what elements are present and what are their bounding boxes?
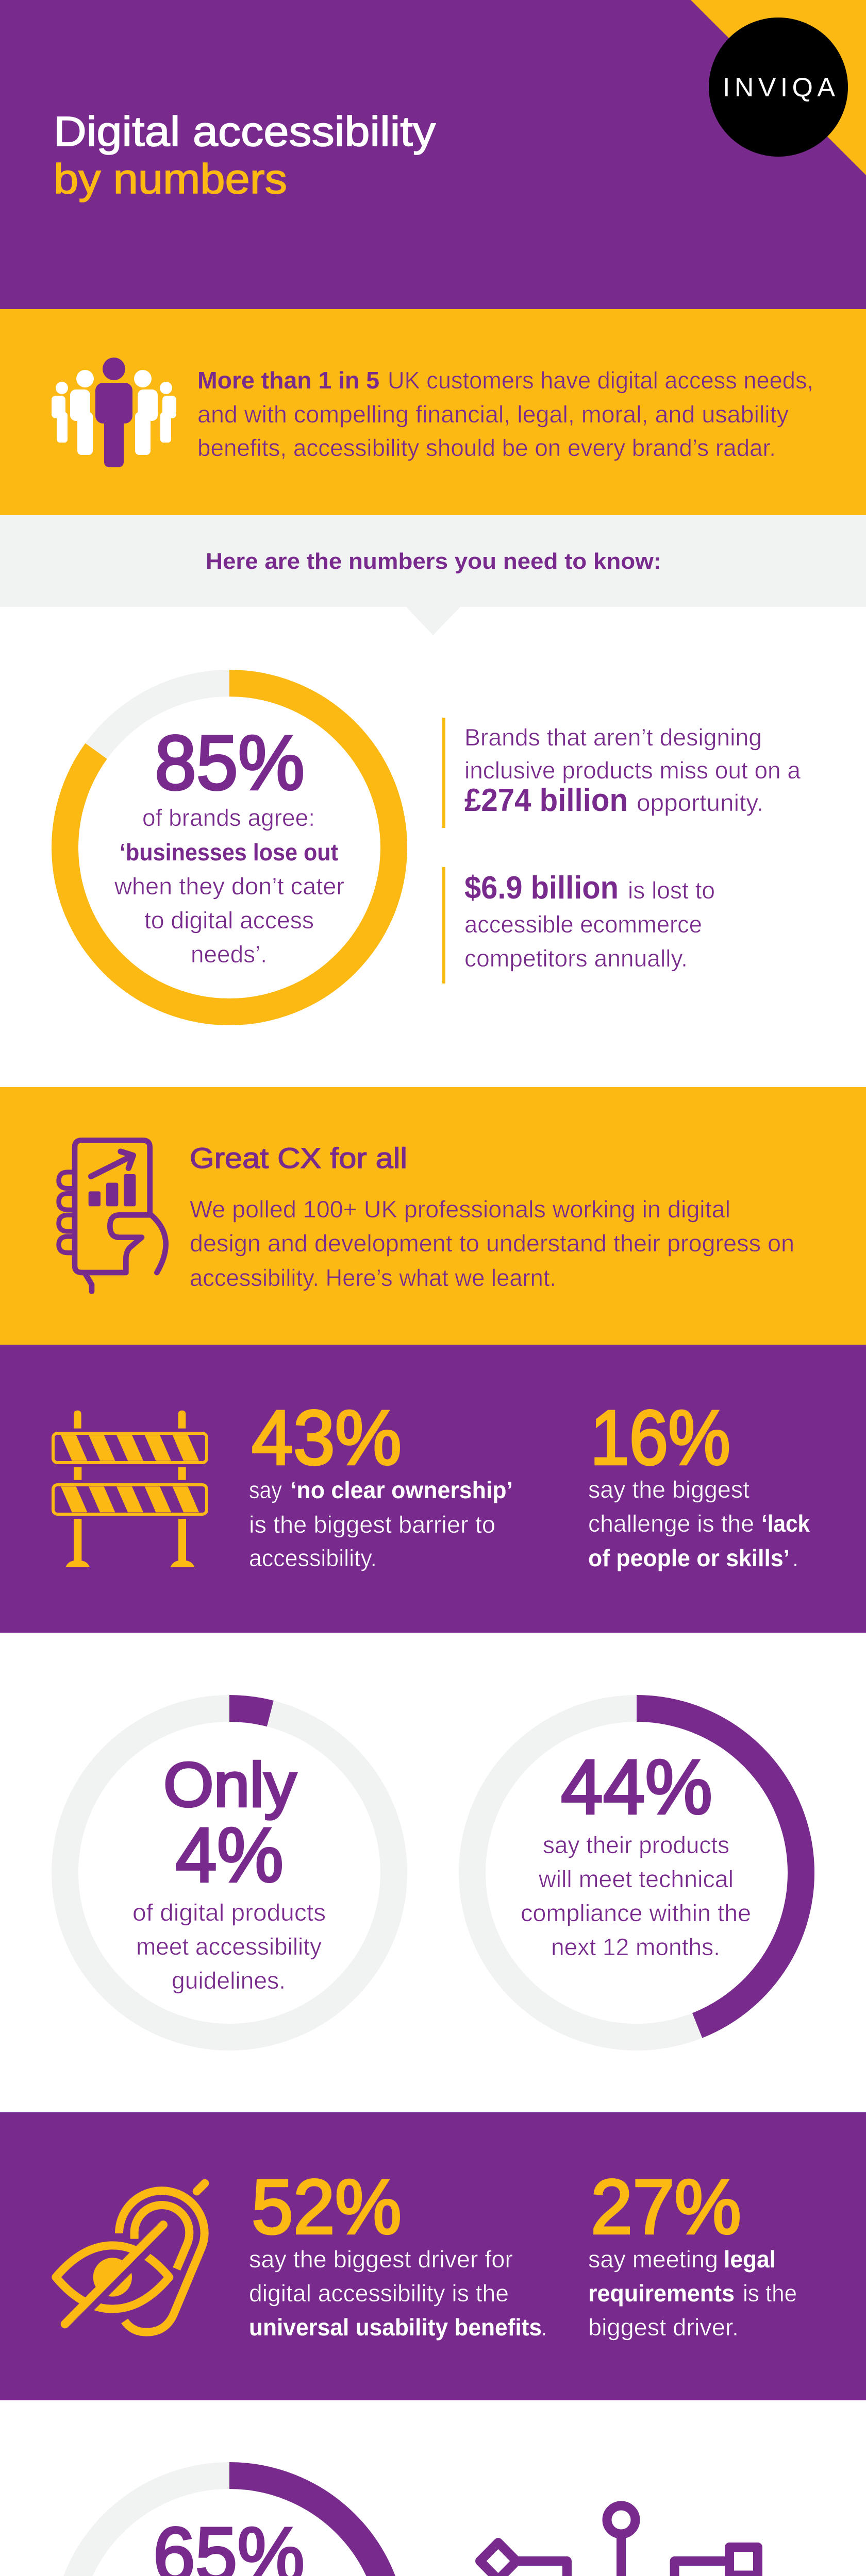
chart: 85% ring: to digital access	[144, 907, 314, 934]
icon: accessible laptop network	[471, 2506, 771, 2576]
chart: 85% ring	[65, 683, 394, 1012]
stat: 43%: is the biggest barrier to	[249, 1511, 495, 1538]
stat: 27%: say meeting	[588, 2246, 718, 2273]
callout: $6.9 billion: $6.9 billion	[464, 870, 619, 906]
icon: crossed eye and ear	[56, 2183, 205, 2332]
stat: 16%: ‘lack	[761, 1510, 810, 1537]
panel: barriers	[0, 1345, 866, 1633]
stat: 16%: 16%	[590, 1394, 730, 1481]
title	[54, 108, 436, 202]
chart: only 4% ring: 4%	[175, 1811, 284, 1898]
chart: only 4% ring: meet accessibility	[136, 1933, 322, 1960]
chart: 44% ring: say their products	[543, 1832, 729, 1858]
text block: design and development to understand their progress on	[190, 1230, 794, 1257]
callout: £274 billion: inclusive products miss out on a	[464, 757, 801, 784]
text block: accessibility. Here’s what we learnt.	[190, 1264, 556, 1291]
stat: 16%: challenge is the	[588, 1510, 754, 1537]
heading: Great CX for all	[190, 1142, 407, 1174]
chart: 85% ring: needs’.	[191, 941, 267, 968]
panel: great CX for all	[0, 1087, 866, 1345]
stat: 16%: .	[792, 1545, 798, 1571]
stat: 43%: 43%	[252, 1394, 402, 1481]
stat: 52%: .	[541, 2314, 547, 2341]
callout: $6.9 billion: competitors annually.	[464, 945, 688, 972]
chart: 85% ring: of brands agree:	[142, 804, 315, 831]
panel: drivers	[0, 2112, 866, 2400]
text block: intro statement: More than 1 in 5	[197, 367, 379, 394]
chart: 44% ring: 44%	[561, 1743, 712, 1830]
chart: only 4% ring: Only	[163, 1750, 296, 1820]
stat: 43%: say	[249, 1477, 282, 1503]
callout: $6.9 billion: is lost to	[628, 877, 715, 904]
panel: intro	[0, 309, 866, 515]
chart: 65% ring	[65, 2476, 394, 2576]
text block: intro statement: benefits, accessibility should be on every brand’s radar.	[197, 434, 776, 461]
title: Digital accessibility	[54, 108, 436, 155]
callout: £274 billion: Brands that aren’t designing	[464, 724, 762, 751]
callout: $6.9 billion	[442, 867, 715, 984]
stat: 27%: biggest driver.	[588, 2314, 739, 2341]
chart: only 4% ring: of digital products	[132, 1899, 326, 1926]
stat: 43%: ‘no clear ownership’	[290, 1477, 513, 1503]
panel: header	[0, 0, 866, 309]
title: by numbers	[54, 156, 287, 202]
stat: 52%	[249, 2163, 547, 2341]
stat: 27%: requirements	[588, 2280, 735, 2307]
chart: 85% ring: ‘businesses lose out	[120, 839, 338, 866]
stat: 43%	[249, 1394, 513, 1571]
chart: 44% ring: will meet technical	[538, 1866, 734, 1892]
chart: only 4% ring: guidelines.	[172, 1967, 286, 1994]
stat: 16%: of people or skills’	[588, 1545, 790, 1571]
chart: 85% ring: when they don’t cater	[114, 873, 344, 900]
stat: 52%: digital accessibility is the	[249, 2280, 509, 2307]
text block: intro statement: and with compelling financial, legal, moral, and usability	[197, 401, 789, 428]
chart: 44% ring: compliance within the	[521, 1900, 751, 1926]
stat: 27%	[588, 2163, 797, 2341]
heading: Here are the numbers you need to know:	[206, 549, 661, 574]
text block: intro statement	[197, 367, 813, 461]
panel: numbers heading	[0, 515, 866, 635]
stat: 16%: say the biggest	[588, 1476, 750, 1503]
icon: group of people	[52, 358, 176, 467]
stat: 27%: legal	[724, 2246, 776, 2273]
stat: 43%: accessibility.	[249, 1545, 377, 1571]
text block: intro statement: UK customers have digital access needs,	[388, 367, 813, 394]
stat: 16%	[588, 1394, 810, 1571]
logo: Inviqa badge	[709, 18, 848, 157]
chart: 44% ring	[472, 1708, 801, 2037]
stat: 52%: 52%	[252, 2163, 402, 2250]
logo: Inviqa badge: INVIQA	[723, 73, 835, 103]
text block	[190, 1196, 794, 1291]
stat: 27%: is the	[743, 2280, 797, 2307]
text block: We polled 100+ UK professionals working in digital	[190, 1196, 730, 1223]
callout: £274 billion: £274 billion	[464, 783, 628, 818]
callout: $6.9 billion: accessible ecommerce	[464, 911, 702, 938]
chart: 85% ring: 85%	[155, 719, 305, 806]
callout: £274 billion	[442, 718, 801, 828]
chart: 44% ring: next 12 months.	[551, 1934, 720, 1960]
stat: 27%: 27%	[591, 2163, 741, 2250]
stat: 52%: universal usability benefits	[249, 2314, 542, 2341]
chart: only 4% ring	[65, 1708, 394, 2037]
icon: phone in hand	[59, 1140, 166, 1292]
icon: road barrier	[53, 1411, 207, 1567]
callout: £274 billion: opportunity.	[637, 789, 763, 816]
stat: 52%: say the biggest driver for	[249, 2246, 513, 2273]
